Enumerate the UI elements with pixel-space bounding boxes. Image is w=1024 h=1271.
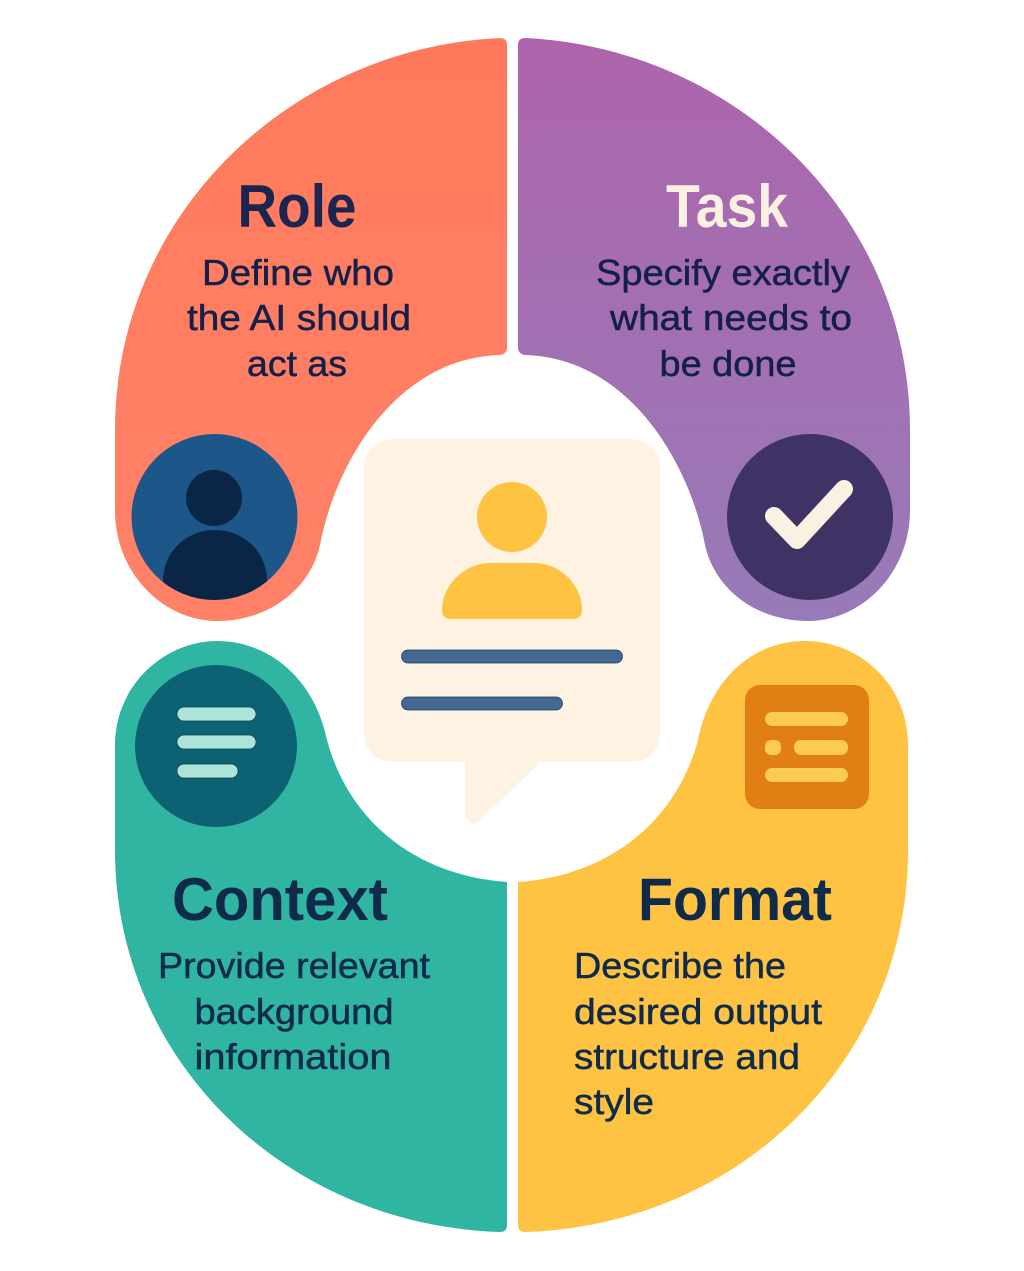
text: context description: Provide relevant (158, 945, 430, 986)
text: format description: style (574, 1081, 654, 1122)
heading: format: Format (638, 866, 832, 933)
center speech bubble (364, 439, 660, 824)
text: format description: desired output (574, 991, 822, 1032)
heading: context: Context (172, 866, 388, 933)
text: format description: Describe the (574, 945, 786, 986)
text: task description: what needs to (609, 297, 852, 338)
text: context description (158, 945, 430, 1077)
text: task description: Specify exactly (596, 252, 850, 293)
panel: format (518, 641, 908, 1232)
line: long text bar (402, 650, 622, 663)
text: task description (596, 252, 852, 384)
text: role description (187, 252, 411, 384)
icon: document layout (745, 685, 869, 809)
text: format description (574, 945, 822, 1122)
heading: role: Role (238, 173, 356, 240)
text: role description: the AI should (187, 297, 411, 338)
text: format description: structure and (574, 1036, 800, 1077)
line: short text bar (402, 697, 562, 710)
heading: task: Task (666, 173, 789, 240)
text: context description: information (194, 1036, 392, 1077)
text: context description: background (194, 991, 394, 1032)
text: task description: be done (660, 343, 796, 384)
panel: context (115, 641, 507, 1232)
text: role description: Define who (202, 252, 394, 293)
icon: text lines in circle (135, 665, 297, 827)
icon: user shoulders (442, 563, 582, 619)
panel: role (115, 38, 507, 621)
icon: check mark in circle (727, 434, 893, 600)
panel: task (518, 38, 910, 621)
icon: person in circle (132, 434, 298, 610)
text: role description: act as (247, 343, 347, 384)
icon: user head (477, 482, 547, 552)
